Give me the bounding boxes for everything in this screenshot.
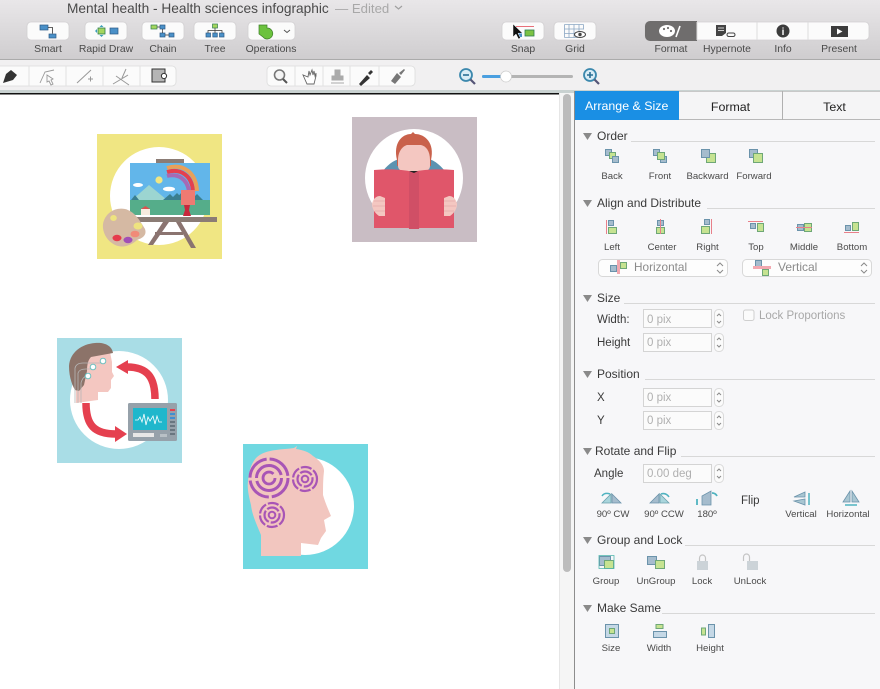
drawing tools group xyxy=(0,66,176,86)
icon: info xyxy=(776,24,790,38)
icon: hypernote xyxy=(716,25,735,36)
icon: flip horizontal xyxy=(843,491,859,505)
button: Operations xyxy=(246,22,296,55)
zoom slider xyxy=(460,69,599,84)
button: Grid: Grid xyxy=(565,44,585,55)
icon: ungroup xyxy=(648,556,664,568)
icon: present xyxy=(831,26,848,37)
section: Position: Position xyxy=(597,367,640,381)
section: Size xyxy=(583,291,875,352)
icon: forward xyxy=(750,150,762,162)
section: Order: Forward xyxy=(736,171,772,182)
icon: front xyxy=(654,150,666,162)
section: Align and Distribute: Center xyxy=(648,242,677,253)
segmented control: Format, Hypernote, Info, Present: Info xyxy=(774,44,792,55)
section: Make Same: Height xyxy=(696,643,724,654)
button: Snap: Snap xyxy=(511,44,535,55)
section: Group and Lock xyxy=(583,533,875,587)
input: angle: 0.00 deg xyxy=(647,468,692,480)
button: Tree xyxy=(194,22,236,55)
section: Size: Width: xyxy=(597,314,630,326)
tabs: Text xyxy=(823,100,846,114)
arrow: monitor to head xyxy=(116,360,155,399)
input: y xyxy=(644,412,724,430)
icon: shape xyxy=(152,69,167,82)
section: Size: Height xyxy=(597,337,631,349)
section: Rotate and Flip: 90º CW xyxy=(597,509,630,520)
button: Chain: Chain xyxy=(149,44,177,55)
icon: lock xyxy=(697,555,708,570)
input: angle xyxy=(644,464,724,482)
canvas xyxy=(0,93,560,689)
section: Rotate and Flip: Vertical xyxy=(785,509,817,520)
section: Make Same: Size xyxy=(602,643,620,654)
icon: direct select xyxy=(40,70,54,85)
section: Position: Y xyxy=(597,415,605,427)
button: Rapid Draw: Rapid Draw xyxy=(79,44,134,55)
section: Rotate and Flip xyxy=(583,444,875,520)
book xyxy=(374,169,454,229)
icon: align center xyxy=(656,219,664,234)
icon: align bottom xyxy=(844,222,859,232)
icon: flip vertical xyxy=(794,492,809,505)
secondary toolbar xyxy=(0,60,880,93)
spirals xyxy=(250,459,317,527)
section: Rotate and Flip: 180º xyxy=(697,509,717,520)
input: height: 0 pix xyxy=(647,337,672,349)
input: x: 0 pix xyxy=(647,392,672,404)
icon: align top xyxy=(748,222,764,232)
dropdown: Horizontal: Horizontal xyxy=(634,260,687,274)
button: Grid xyxy=(554,22,596,55)
section: Align and Distribute: Left xyxy=(604,242,620,253)
section: Align and Distribute: Align and Distribute xyxy=(597,196,701,210)
view tools group xyxy=(267,66,415,86)
icon: info: i xyxy=(782,27,785,38)
section: Make Same: Width xyxy=(647,643,671,654)
section: Group and Lock: Group xyxy=(593,576,619,587)
icon: add point xyxy=(77,70,93,83)
icon: eyedropper xyxy=(359,70,373,86)
icon: scissors xyxy=(113,69,129,85)
segmented control: Format, Hypernote, Info, Present: Format xyxy=(655,44,688,55)
section: Align and Distribute: Middle xyxy=(790,242,818,253)
tabs xyxy=(575,91,880,120)
segmented control: Format, Hypernote, Info, Present: Hypernote xyxy=(703,44,751,55)
icon: brush xyxy=(391,69,405,84)
section: Rotate and Flip: Horizontal xyxy=(826,509,870,520)
right panel xyxy=(574,91,880,689)
illustration: head with brain spirals xyxy=(243,444,368,569)
section: Size: Size xyxy=(597,291,621,305)
input: x xyxy=(644,388,724,406)
icon: align middle xyxy=(796,224,812,232)
dropdown: Horizontal xyxy=(598,260,728,276)
EEG monitor xyxy=(128,403,177,441)
button: Chain xyxy=(142,22,184,55)
input: width: 0 pix xyxy=(647,314,672,326)
icon: same size xyxy=(606,624,618,638)
illustration: person reading a book xyxy=(352,117,477,242)
button: Snap xyxy=(502,22,544,55)
face xyxy=(76,352,114,403)
tabs: Format xyxy=(711,100,751,114)
icon: align left xyxy=(606,220,616,234)
hands xyxy=(372,196,457,216)
section: Align and Distribute xyxy=(583,196,875,276)
section: Order: Front xyxy=(649,171,672,182)
rainbow xyxy=(167,167,197,191)
section: Group and Lock: UnLock xyxy=(734,576,766,587)
section: Rotate and Flip: Rotate and Flip xyxy=(595,444,677,458)
section: Align and Distribute: Bottom xyxy=(837,242,867,253)
window title: Mental health - Health sciences infographic xyxy=(67,1,329,16)
icon: rotate 180 xyxy=(697,491,717,505)
section: Order xyxy=(583,129,875,182)
section: Rotate and Flip: 90º CCW xyxy=(644,509,685,520)
section: Position: X xyxy=(597,392,605,404)
section: Align and Distribute: Top xyxy=(748,242,764,253)
face xyxy=(398,145,430,172)
icon: mouse cursor xyxy=(513,24,522,39)
main toolbar xyxy=(0,0,880,60)
icon: back xyxy=(606,150,618,162)
section: Order: Back xyxy=(601,171,623,182)
section: Rotate and Flip: Flip xyxy=(741,495,760,507)
segmented control: Format, Hypernote, Info, Present: Present xyxy=(821,44,857,55)
section: Rotate and Flip: Angle xyxy=(594,468,623,480)
icon: unlock xyxy=(744,554,758,570)
button: Rapid Draw xyxy=(79,22,134,55)
dropdown: Vertical: Vertical xyxy=(778,260,817,274)
icon: magnifier xyxy=(274,70,287,83)
input: y: 0 pix xyxy=(647,415,672,427)
segmented control: Format, Hypernote, Info, Present xyxy=(645,21,869,55)
illustration: painting easel xyxy=(97,134,222,259)
section: Order: Order xyxy=(597,129,628,143)
icon: stamp xyxy=(331,70,344,83)
icon: align right xyxy=(702,219,712,234)
button: Tree: Tree xyxy=(205,44,226,55)
icon: pen xyxy=(3,70,17,83)
icon: rotate 90 ccw xyxy=(650,494,669,503)
input: width xyxy=(644,310,724,328)
section: Position xyxy=(583,367,875,430)
section: Order: Backward xyxy=(686,171,729,182)
icon: same width xyxy=(654,624,666,638)
button: Smart xyxy=(27,22,69,55)
palette xyxy=(103,209,146,247)
window title: — Edited xyxy=(335,1,389,16)
button: Smart: Smart xyxy=(34,44,62,55)
arrow: head to monitor xyxy=(86,403,127,442)
dropdown: Vertical xyxy=(742,260,872,276)
section: Group and Lock: Group and Lock xyxy=(597,533,683,547)
hair xyxy=(69,343,113,391)
icon: same height xyxy=(702,624,714,638)
illustration: head and EEG monitor xyxy=(57,338,182,463)
section: Make Same xyxy=(583,601,875,654)
tabs: Arrange & Size xyxy=(585,99,668,113)
input: height xyxy=(644,334,724,352)
icon: backward xyxy=(702,150,716,162)
checkbox: Lock Proportions: Lock Proportions xyxy=(759,310,846,322)
section: Make Same: Make Same xyxy=(597,601,661,615)
icon: group xyxy=(599,556,614,568)
icon: palette xyxy=(659,25,680,37)
section: Group and Lock: Lock xyxy=(692,576,712,587)
icon: rotate 90 cw xyxy=(602,493,621,503)
button: Operations: Operations xyxy=(246,44,296,55)
scrollbar xyxy=(559,93,575,689)
section: Align and Distribute: Right xyxy=(696,242,719,253)
hair xyxy=(396,132,432,166)
section: Group and Lock: UnGroup xyxy=(637,576,675,587)
icon: hand xyxy=(303,70,316,84)
